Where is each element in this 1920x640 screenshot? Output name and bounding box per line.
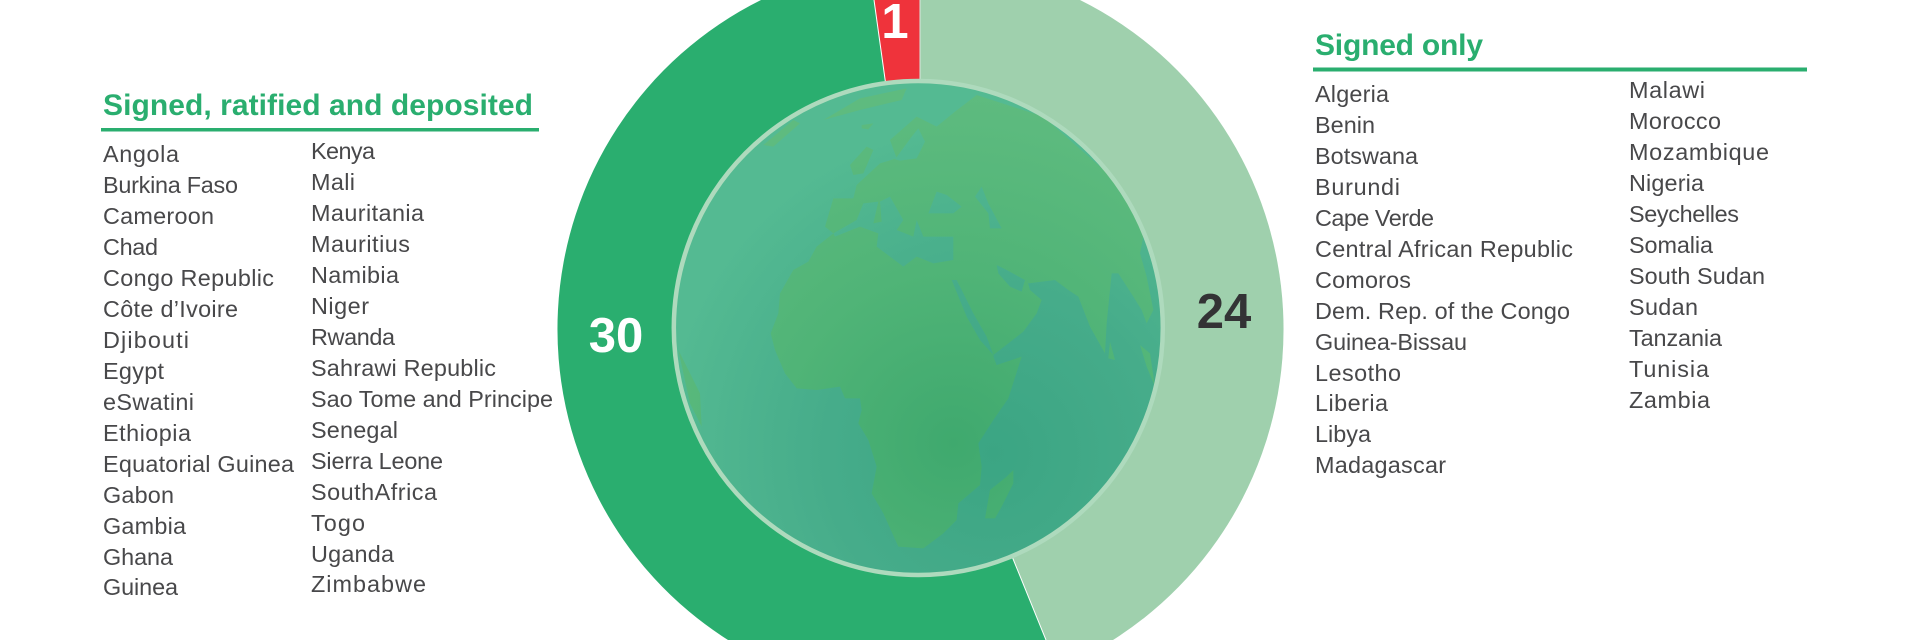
list: signed, ratified and deposited, column 1: Egypt [103,358,164,384]
list: signed, ratified and deposited, column 2: Rwanda [311,324,396,350]
list: signed, ratified and deposited, column 1 [103,141,295,600]
list: signed only, column 2: Seychelles [1629,201,1739,227]
list: signed, ratified and deposited, column 2: Zimbabwe [311,571,426,597]
list: signed, ratified and deposited, column 1: Chad [103,234,158,260]
divider: right heading rule [1313,68,1807,72]
list: signed, ratified and deposited, column 2: Senegal [311,417,398,443]
list: signed only, column 2: Nigeria [1629,170,1705,196]
heading: signed, ratified and deposited: Signed, ratified and deposited [103,89,533,122]
list: signed, ratified and deposited, column 1: Equatorial Guinea [103,451,295,477]
list: signed, ratified and deposited, column 1: Burkina Faso [103,172,238,198]
list: signed only, column 2 [1629,77,1769,413]
list: signed only, column 1 [1315,81,1573,478]
list: signed only, column 2: South Sudan [1629,263,1765,289]
segment: signed, ratified and deposited 30 [557,0,1046,640]
list: signed only, column 2: Malawi [1629,77,1705,103]
list: signed, ratified and deposited, column 1: Côte d’Ivoire [103,296,238,322]
segment: signed only 24 [920,0,1284,640]
value: 24: 24 [1197,285,1251,339]
list: signed only, column 2: Morocco [1629,108,1721,134]
list: signed only, column 1: Cape Verde [1315,205,1434,231]
list: signed only, column 1: Lesotho [1315,360,1401,386]
list: signed, ratified and deposited, column 1: eSwatini [103,389,194,415]
list: signed, ratified and deposited, column 1: Guinea [103,574,179,600]
list: signed, ratified and deposited, column 2: Mauritius [311,231,410,257]
list: signed, ratified and deposited, column 1: Congo Republic [103,265,274,291]
list: signed only, column 2: Tunisia [1629,356,1710,382]
heading: signed only: Signed only [1315,29,1483,62]
panel: donut chart [557,0,1284,640]
list: signed only, column 1: Central African Republic [1315,236,1573,262]
list: signed only, column 2: Zambia [1629,387,1711,413]
list: signed, ratified and deposited, column 1: Cameroon [103,203,214,229]
list: signed only, column 1: Algeria [1315,81,1390,107]
list: signed, ratified and deposited, column 1: Ghana [103,544,174,570]
list: signed, ratified and deposited, column 2: Sao Tome and Principe [311,386,553,412]
list: signed, ratified and deposited, column 2: Togo [311,510,365,536]
list: signed only, column 2: Tanzania [1629,325,1723,351]
list: signed only, column 2: Sudan [1629,294,1698,320]
list: signed only, column 1: Comoros [1315,267,1411,293]
value: 30: 30 [589,309,643,363]
list: signed, ratified and deposited, column 2: Niger [311,293,369,319]
list: signed, ratified and deposited, column 2: Kenya [311,138,376,164]
list: signed, ratified and deposited, column 2: Namibia [311,262,400,288]
segment: 1 [874,0,920,330]
divider: left heading rule [101,128,539,132]
list: signed only, column 2: Mozambique [1629,139,1769,165]
list: signed only, column 1: Guinea-Bissau [1315,329,1467,355]
list: signed, ratified and deposited, column 2 [311,138,553,597]
list: signed, ratified and deposited, column 1: Gabon [103,482,174,508]
list: signed, ratified and deposited, column 2: Sahrawi Republic [311,355,496,381]
list: signed only, column 1: Benin [1315,112,1375,138]
list: signed, ratified and deposited, column 2: Sierra Leone [311,448,443,474]
list: signed, ratified and deposited, column 1: Gambia [103,513,187,539]
list: signed, ratified and deposited, column 2: Uganda [311,541,395,567]
list: signed, ratified and deposited, column 2: Mauritania [311,200,425,226]
list: signed only, column 1: Liberia [1315,390,1389,416]
list: signed, ratified and deposited, column 1: Djibouti [103,327,189,353]
list: signed, ratified and deposited, column 1: Ethiopia [103,420,192,446]
list: signed only, column 1: Burundi [1315,174,1400,200]
list: signed only, column 1: Madagascar [1315,452,1446,478]
icon: globe centred on Africa [660,70,1180,590]
list: signed only, column 1: Dem. Rep. of the Congo [1315,298,1570,324]
list: signed, ratified and deposited, column 1: Angola [103,141,180,167]
list: signed, ratified and deposited, column 2: Mali [311,169,355,195]
list: signed only, column 1: Libya [1315,421,1372,447]
list: signed only, column 2: Somalia [1629,232,1714,258]
list: signed only, column 1: Botswana [1315,143,1419,169]
list: signed, ratified and deposited, column 2: SouthAfrica [311,479,438,505]
